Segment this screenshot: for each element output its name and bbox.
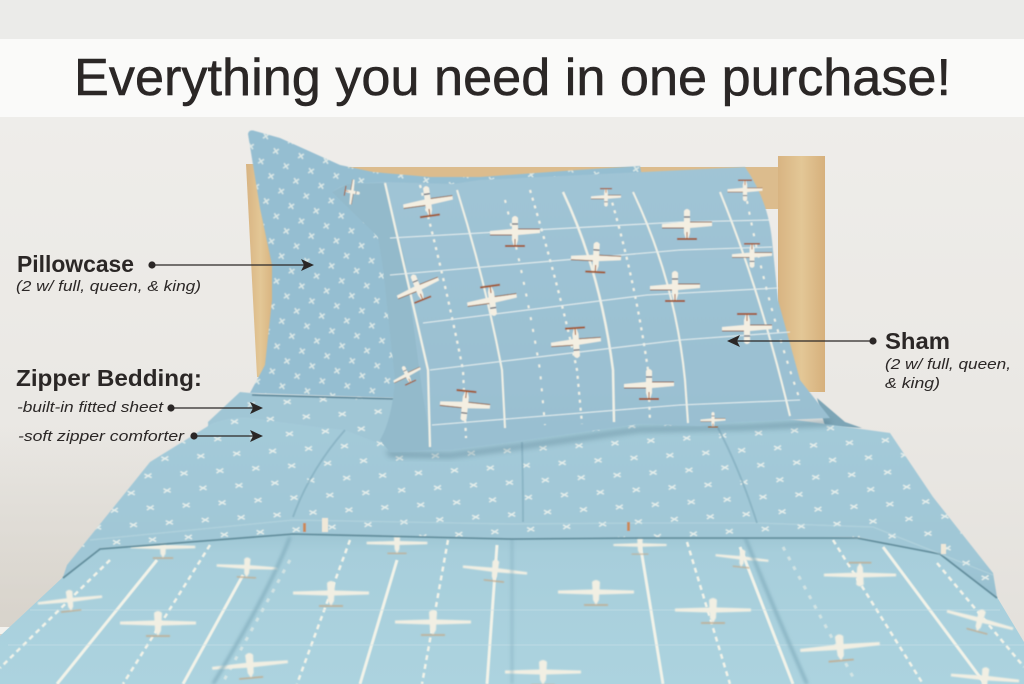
wall shadow left [0,430,260,684]
runway stripes on comforter [0,540,1024,684]
baseboard [0,627,18,634]
callout: pillowcase [16,251,314,295]
fold seams [293,428,757,523]
comforter label: -soft zipper comforter [18,428,185,445]
fitted sheet [208,392,862,460]
sham quilting lines [390,220,800,425]
headboard left post [246,164,275,377]
sham arrow [727,335,877,347]
pillowcase [248,130,644,398]
sham flange shading [332,183,432,452]
sham note second line: & king) [885,375,940,392]
pillowcase arrow [148,259,314,271]
headboard [246,156,825,392]
sheet shadow under pillow [252,395,395,399]
comforter arrow [190,430,263,442]
zipper bedding heading: Zipper Bedding: [16,365,202,391]
comforter planes [37,533,1020,684]
sheet right edge [817,398,862,428]
top band [0,0,1024,39]
pillowcase label: Pillowcase [17,251,134,277]
quilting lines on comforter [8,610,1024,645]
sham runway stripes [385,183,800,447]
sham [332,167,830,452]
sham planes [342,178,772,428]
sham shadow [385,420,830,458]
fitted sheet arrow [167,402,263,414]
headboard rail [262,167,786,209]
bottom comforter [0,530,1024,684]
callout: zipper bedding [16,365,263,445]
callout: sham [727,328,1011,392]
headboard right post [778,156,825,392]
comforter seams [213,537,807,684]
fold lip stitching [90,520,993,575]
fitted sheet label: -built-in fitted sheet [17,399,164,416]
sham label: Sham [885,328,950,354]
folded comforter top [63,410,997,598]
title banner [0,39,1024,117]
pillowcase note: (2 w/ full, queen, & king) [16,278,201,295]
fold stripe tabs [303,518,946,554]
sham note: (2 w/ full, queen, [885,356,1011,373]
title: Everything you need in one purchase! [74,49,951,107]
fold edge shadow [63,534,997,598]
